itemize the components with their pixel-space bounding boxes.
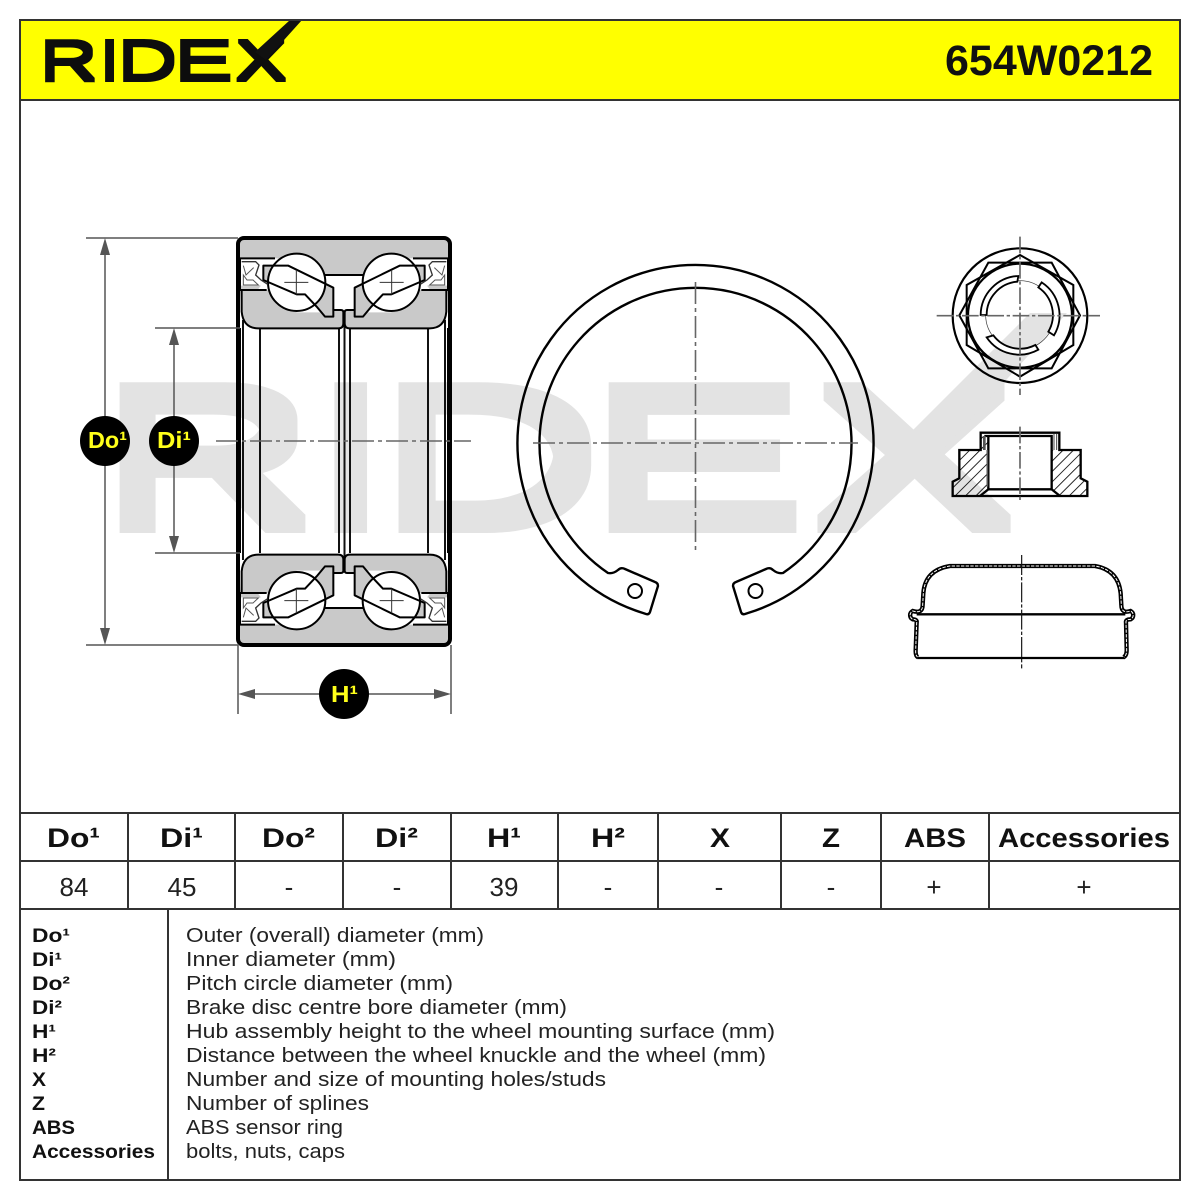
legend keys: Di¹ — [32, 949, 62, 971]
legend keys: Z — [32, 1093, 45, 1115]
table header row: Di¹ — [160, 823, 203, 853]
legend descriptions: Outer (overall) diameter (mm) — [186, 925, 484, 947]
table header row: H¹ — [487, 823, 521, 853]
table header row: ABS — [904, 823, 966, 853]
header band — [20, 20, 1180, 100]
legend descriptions — [186, 925, 775, 1163]
logo: RIDEX: R — [40, 29, 98, 92]
logo: RIDEX: E — [174, 28, 233, 92]
table header row: Do¹ — [47, 823, 100, 853]
legend descriptions: Number of splines — [186, 1093, 369, 1115]
bearing cross-section drawing — [216, 238, 471, 645]
legend keys — [32, 925, 155, 1163]
legend descriptions: Inner diameter (mm) — [186, 949, 396, 971]
dimension: Di1 — [149, 328, 240, 553]
table header row: H² — [591, 823, 625, 853]
table value row: 39 — [490, 872, 518, 902]
dust cap — [910, 555, 1133, 668]
legend keys: Do¹ — [32, 925, 70, 947]
dimension: Do1: Do¹ — [88, 427, 127, 453]
nut end view — [937, 237, 1100, 395]
table header row: Z — [822, 823, 840, 853]
dimension: H1 — [238, 645, 451, 719]
legend keys: Di² — [32, 997, 63, 1019]
legend descriptions: bolts, nuts, caps — [186, 1141, 345, 1163]
table header row — [47, 823, 1170, 853]
spec table — [20, 813, 1180, 909]
logo: RIDEX: X — [236, 29, 287, 93]
dimension: H1: H¹ — [331, 681, 358, 707]
table value row: 45 — [168, 872, 196, 902]
legend descriptions: Distance between the wheel knuckle and the wheel (mm) — [186, 1045, 766, 1067]
legend keys: Accessories — [32, 1141, 155, 1163]
legend descriptions: Number and size of mounting holes/studs — [186, 1069, 606, 1091]
table value row: - — [393, 872, 401, 902]
table header row: Di² — [375, 823, 418, 853]
watermark: RIDEX: E — [586, 350, 807, 565]
legend keys: Do² — [32, 973, 71, 995]
nut section view — [953, 427, 1087, 502]
table header row: Accessories — [998, 823, 1170, 853]
legend keys: ABS — [32, 1117, 75, 1139]
watermark: RIDEX: I — [314, 350, 387, 566]
legend keys: H¹ — [32, 1021, 56, 1043]
table header row: X — [710, 823, 730, 853]
table value row: + — [926, 872, 942, 902]
table value row: 84 — [60, 872, 88, 902]
dimension: Di1: Di¹ — [157, 427, 191, 453]
table value row: - — [827, 872, 835, 902]
table value row: - — [604, 872, 612, 902]
table value row — [60, 872, 1092, 902]
table value row: - — [715, 872, 723, 902]
watermark: RIDEX — [99, 313, 1067, 566]
legend descriptions: ABS sensor ring — [186, 1117, 343, 1139]
logo: RIDEX — [40, 20, 302, 93]
watermark: RIDEX: D — [377, 349, 602, 565]
legend — [32, 909, 775, 1180]
table header row: Do² — [262, 823, 315, 853]
legend descriptions: Pitch circle diameter (mm) — [186, 973, 453, 995]
table value row: - — [285, 872, 293, 902]
legend descriptions: Brake disc centre bore diameter (mm) — [186, 997, 567, 1019]
logo: RIDEX: D — [117, 29, 177, 93]
dimension: Do1 — [80, 238, 238, 645]
legend descriptions: Hub assembly height to the wheel mounting surface (mm) — [186, 1021, 775, 1043]
table value row: + — [1076, 872, 1092, 902]
watermark: RIDEX: R — [99, 350, 316, 565]
circlip retaining ring — [518, 265, 873, 614]
part number: 654W0212 — [945, 37, 1153, 85]
logo: RIDEX: I — [99, 29, 120, 93]
watermark: RIDEX: X — [814, 350, 1013, 566]
legend keys: H² — [32, 1045, 57, 1067]
legend keys: X — [32, 1069, 46, 1091]
